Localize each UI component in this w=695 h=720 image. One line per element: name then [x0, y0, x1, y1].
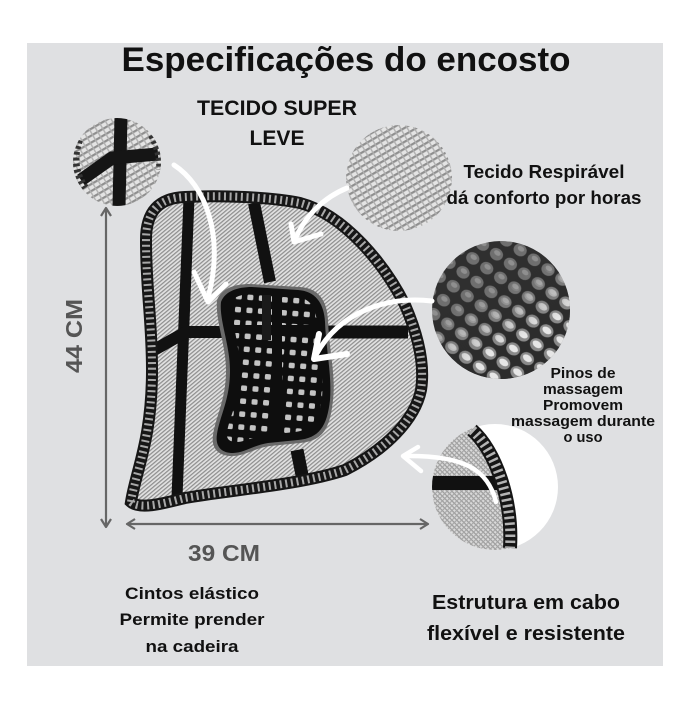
- width label: 39 CM: [188, 540, 260, 566]
- text: breathable fabric: [446, 162, 642, 208]
- text: massage pins: Pinos de: [550, 365, 616, 382]
- title: Especificações do encosto: [122, 41, 570, 79]
- detail circle: breathable fabric: [346, 125, 452, 231]
- height dimension arrow: [101, 208, 111, 527]
- arrow: strap to cushion: [174, 165, 226, 302]
- grey background panel: [27, 43, 663, 666]
- massage pad: [213, 284, 334, 456]
- lumbar backrest cushion: [131, 196, 422, 506]
- heading: tecido super leve: TECIDO SUPER: [197, 97, 357, 120]
- text: massage pins: [511, 365, 655, 446]
- heading: tecido super leve: [197, 97, 357, 150]
- text: elastic straps: Permite prender: [120, 610, 265, 629]
- text: elastic straps: Cintos elástico: [125, 584, 259, 603]
- text: massage pins: Promovem: [543, 397, 623, 414]
- text: breathable fabric: Tecido Respirável: [464, 162, 624, 182]
- detail circle: strap junction: [73, 117, 161, 206]
- text: elastic straps: na cadeira: [146, 637, 239, 656]
- elastic straps: [154, 198, 408, 497]
- height label: 44 CM: [61, 299, 87, 373]
- detail circle: massage pins: [432, 241, 570, 379]
- width dimension arrow: [127, 519, 428, 529]
- arrow: fabric to cushion: [291, 188, 347, 242]
- text: flexible cable structure: flexível e resistente: [427, 623, 625, 645]
- text: flexible cable structure: [427, 592, 625, 645]
- rope edge: [131, 196, 422, 506]
- heading: tecido super leve: LEVE: [250, 127, 304, 150]
- text: breathable fabric: dá conforto por horas: [446, 188, 642, 208]
- detail circle: cable edge: [432, 420, 558, 555]
- mesh body: [131, 196, 422, 506]
- infographic: backrest specifications: [27, 43, 663, 666]
- arrow: pins to pad: [314, 300, 432, 359]
- text: massage pins: massagem durante: [511, 413, 655, 430]
- text: elastic straps: [120, 584, 265, 656]
- text: flexible cable structure: Estrutura em cabo: [432, 592, 620, 614]
- arrow: cable to cushion edge: [403, 447, 496, 502]
- text: massage pins: o uso: [564, 429, 602, 446]
- text: massage pins: massagem: [543, 381, 623, 398]
